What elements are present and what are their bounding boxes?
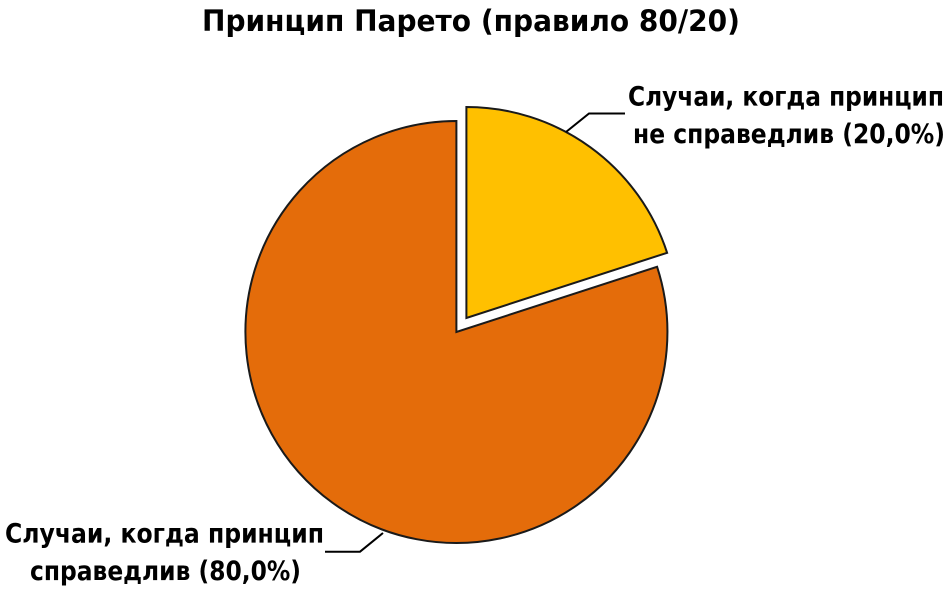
label: 20% slice	[628, 82, 945, 150]
title: Принцип Парето (правило 80/20)	[202, 4, 740, 38]
label: 80% slice	[5, 518, 324, 587]
label: 80% slice: справедлив (80,0%)	[30, 556, 301, 587]
slice: 20% yellow	[466, 107, 667, 318]
label: 80% slice: Случаи, когда принцип	[5, 518, 324, 550]
pie chart	[245, 107, 667, 543]
slice: 80% orange	[245, 121, 667, 543]
leader line: 80% label	[325, 533, 383, 552]
leader line: 20% label	[566, 114, 625, 132]
